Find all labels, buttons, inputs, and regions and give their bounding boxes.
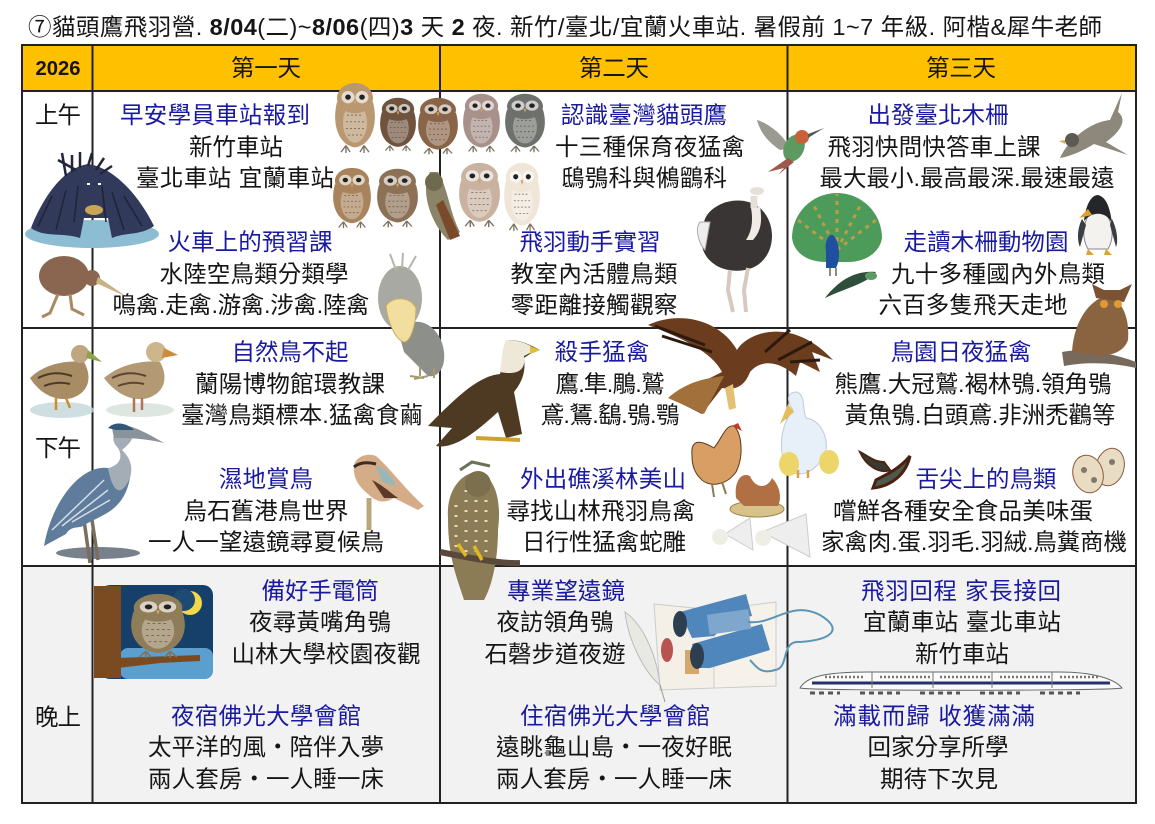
text: day one evening: 備好手電筒 — [262, 578, 378, 604]
text: day three afternoon: 黃魚鴞.白頭鳶.非洲禿鸛等 — [844, 402, 1116, 428]
text: day one afternoon: 烏石舊港鳥世界 — [184, 498, 348, 524]
icon: ducklings — [779, 450, 839, 476]
text: day one morning: 早安學員車站報到 — [120, 102, 310, 128]
icon: penguin — [1078, 195, 1117, 255]
icon: peacock feather — [825, 272, 877, 298]
icon: eagle owl on branch — [1062, 284, 1136, 368]
text: day three afternoon: 舌尖上的鳥類 — [916, 466, 1056, 492]
icon: white goose — [780, 392, 826, 478]
text: day three evening: 期待下次見 — [880, 766, 998, 792]
title: ⑦貓頭鷹飛羽營. 8/04(二)~8/06(四)3 天 2 夜. 新竹/臺北/宜蘭火車站. 暑假前 1~7 年級. 阿楷&犀牛老師 — [28, 14, 1102, 40]
text: day two evening: 兩人套房・一人睡一床 — [496, 766, 732, 792]
text: day two evening: 專業望遠鏡 — [507, 578, 625, 604]
icon: hen on nest — [730, 475, 784, 517]
icon: bullet train — [800, 672, 1122, 693]
text: day one afternoon: 蘭陽博物館環教課 — [195, 371, 385, 397]
text: day three afternoon: 家禽肉.蛋.羽毛.羽絨.鳥糞商機 — [821, 529, 1127, 555]
icon: shuttlecocks — [712, 514, 810, 557]
text: day one evening: 夜尋黃嘴角鴞 — [249, 609, 391, 635]
text: day three evening: 飛羽回程 家長接回 — [861, 578, 1061, 604]
text: day three evening: 新竹車站 — [915, 641, 1009, 667]
icon: peacock — [792, 193, 882, 276]
text: day three morning: 九十多種國內外鳥類 — [891, 261, 1105, 287]
icon: hummingbird — [757, 120, 824, 175]
time of day labels: 晚上 — [35, 704, 81, 730]
text: day one evening: 太平洋的風・陪伴入夢 — [148, 734, 384, 760]
text: day one morning: 火車上的預習課 — [168, 229, 332, 255]
icon: shoebill — [378, 253, 444, 379]
text: day two afternoon: 鷹.隼.鵰.鷲 — [556, 371, 664, 397]
text: day one afternoon: 臺灣鳥類標本.猛禽食繭 — [181, 402, 423, 428]
text: day three afternoon: 嚐鮮各種安全食品美味蛋 — [833, 498, 1093, 524]
text: day two morning: 零距離接觸觀察 — [510, 292, 678, 318]
text: day two afternoon: 鳶.鵟.鷂.鴞.鶚 — [540, 402, 680, 428]
table header row: 2026 — [36, 58, 80, 80]
icon: owls row two — [333, 163, 540, 240]
text: day one afternoon: 自然鳥不起 — [232, 339, 348, 365]
text: day one afternoon: 濕地賞鳥 — [219, 466, 313, 492]
icon: ostrich — [697, 187, 772, 312]
text: day two evening: 住宿佛光大學會館 — [520, 703, 710, 729]
text: day two evening: 遠眺龜山島・一夜好眠 — [496, 734, 732, 760]
text: day one morning — [112, 102, 370, 318]
icon: duck left — [30, 345, 102, 418]
icon: black heron canopy — [25, 152, 159, 248]
icon: quill feather — [625, 612, 665, 702]
icon: owls row one — [335, 83, 545, 154]
table header row — [36, 55, 996, 81]
text: day three evening: 回家分享所學 — [868, 734, 1008, 760]
icon: bird field guide book — [654, 602, 776, 690]
text: day two afternoon: 殺手猛禽 — [554, 339, 650, 365]
icon: shrike — [354, 455, 424, 530]
time of day labels: 下午 — [35, 435, 81, 461]
text: day two morning: 飛羽動手實習 — [520, 229, 660, 255]
text: day two evening — [484, 578, 732, 792]
icon: duck right — [104, 342, 178, 417]
text: day one evening: 兩人套房・一人睡一床 — [148, 766, 384, 792]
text: day one afternoon: 一人一望遠鏡尋夏候鳥 — [148, 529, 384, 555]
text: day three afternoon: 鳥園日夜猛禽 — [890, 339, 1032, 365]
time of day labels — [35, 102, 81, 730]
text: day three evening: 宜蘭車站 臺北車站 — [863, 609, 1061, 635]
text: day three evening — [833, 578, 1061, 792]
text: day two evening: 夜訪領角鴞 — [496, 609, 614, 635]
icon: quail eggs — [1069, 445, 1128, 496]
text: day one evening — [148, 578, 420, 792]
text: day one morning: 臺北車站 宜蘭車站 — [136, 165, 334, 191]
icon: flying eagle — [648, 318, 833, 414]
text: day three morning: 最大最小.最高最深.最速最遠 — [820, 165, 1114, 191]
text: day two morning: 認識臺灣貓頭鷹 — [561, 102, 727, 128]
text: day three morning: 走讀木柵動物園 — [904, 229, 1068, 255]
text: day three morning — [820, 102, 1114, 318]
text: day one morning: 鳴禽.走禽.游禽.涉禽.陸禽 — [112, 292, 370, 318]
text: day three morning: 飛羽快問快答車上課 — [828, 134, 1040, 160]
icon: hen standing — [692, 423, 742, 497]
text: day one evening: 山林大學校園夜觀 — [232, 641, 420, 667]
text: day two morning: 鴟鴞科與鵂鶹科 — [561, 165, 727, 191]
text: day two morning: 十三種保育夜猛禽 — [555, 134, 745, 160]
text: day one morning: 水陸空鳥類分類學 — [160, 261, 348, 287]
icon: bald eagle — [428, 340, 540, 446]
text: day three evening: 滿載而歸 收獲滿滿 — [833, 703, 1035, 729]
text: day two afternoon: 日行性猛禽蛇雕 — [522, 529, 686, 555]
text: day three morning: 出發臺北木柵 — [868, 102, 1008, 128]
icon: kiwi — [39, 256, 127, 317]
text: day two morning — [510, 102, 745, 318]
text: day three afternoon — [821, 339, 1127, 555]
text: day one afternoon — [148, 339, 423, 555]
table header row: 第三天 — [926, 55, 996, 81]
time of day labels: 上午 — [35, 102, 81, 128]
icon: century egg slices — [860, 452, 910, 488]
text: day one evening: 夜宿佛光大學會館 — [171, 703, 361, 729]
text: day two evening: 石磬步道夜遊 — [484, 641, 626, 667]
text: day two afternoon: 尋找山林飛羽鳥禽 — [506, 498, 696, 524]
text: day two afternoon — [506, 339, 696, 555]
text: day two afternoon: 外出礁溪林美山 — [520, 466, 686, 492]
icon: crested serpent eagle — [440, 462, 520, 600]
icon: grey heron — [44, 424, 164, 563]
table header row: 第一天 — [231, 55, 301, 81]
table header row: 第二天 — [579, 55, 649, 81]
icon: binoculars — [673, 594, 833, 671]
text: day one morning: 新竹車站 — [189, 134, 283, 160]
icon: night owl picture — [94, 585, 213, 679]
text: day three afternoon: 熊鷹.大冠鷲.褐林鴞.領角鴞 — [834, 371, 1112, 397]
icon: peregrine falcon — [1059, 93, 1128, 158]
text: day three morning: 六百多隻飛天走地 — [878, 292, 1068, 318]
text: day two morning: 教室內活體鳥類 — [510, 261, 678, 287]
